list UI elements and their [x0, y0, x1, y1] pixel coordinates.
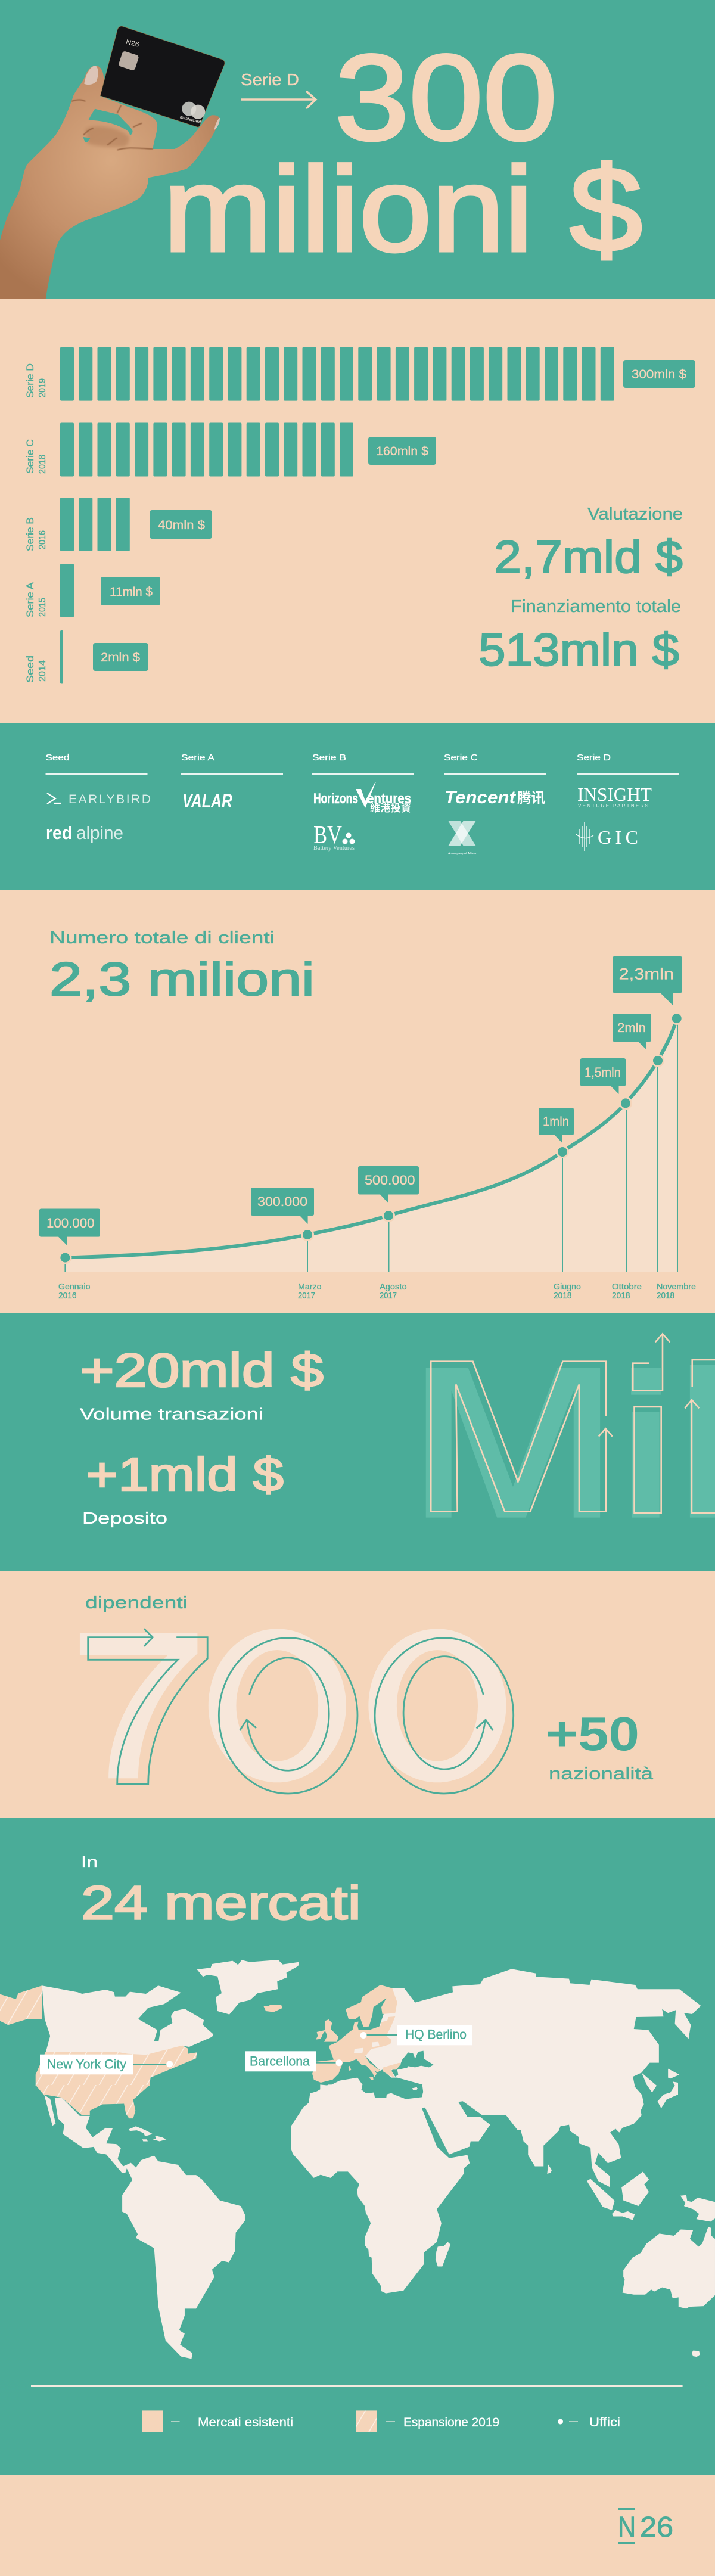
label: Serie D: Serie D [241, 70, 299, 89]
logo: Tencent: 腾讯 [517, 790, 545, 806]
legend item: Mercati esistenti [142, 2410, 293, 2432]
logo: Battery Ventures: Battery Ventures [313, 845, 355, 852]
logo: Horizons Ventures [313, 782, 411, 814]
panel: markets [0, 1818, 715, 2475]
row label: Seed 2014 [24, 655, 48, 683]
column: Serie D [576, 753, 679, 851]
logo: Earlybird: EARLYBIRD [69, 793, 151, 806]
row label: Serie B 2016: Serie B [24, 517, 36, 551]
value tag: 40mln $ [150, 510, 212, 539]
column: Serie C [444, 753, 546, 856]
axis labels: dates: Novembre [657, 1282, 696, 1292]
panel: hero [0, 0, 715, 299]
column: Serie A [181, 753, 283, 812]
axis labels: dates: 2018 [554, 1291, 572, 1301]
row label: Serie A 2015: 2015 [38, 598, 48, 617]
axis labels: dates: 2018 [657, 1291, 674, 1301]
axis labels: dates: Giugno [554, 1282, 581, 1292]
value tag: 2mln $: 2mln $ [101, 651, 140, 664]
graphic: Mil outline lettering [426, 1334, 715, 1518]
axis labels: dates: 2016 [58, 1291, 76, 1301]
axis labels: dates: Marzo [298, 1282, 322, 1292]
column: Seed [45, 753, 151, 843]
logo: Tencent [444, 788, 545, 807]
axis labels: dates: 2017 [298, 1291, 315, 1301]
bars: Serie D 300mln [60, 347, 614, 401]
value tag: 11mln $ [101, 577, 160, 605]
callout: 500.000: 500.000 [365, 1173, 415, 1188]
stat: 2,7mld $: 2,7mld $ [494, 532, 683, 583]
logo: N26: N [618, 2512, 636, 2543]
callout: 500.000 [358, 1166, 419, 1202]
label: dipendenti: dipendenti [85, 1593, 188, 1612]
value tag: 300mln $: 300mln $ [632, 368, 686, 381]
callout: 2mln [613, 1014, 651, 1049]
stat: +20mld $: +20mld $ [80, 1344, 324, 1397]
label: Volume transazioni: Volume transazioni [80, 1405, 263, 1423]
value tag: 2mln $ [93, 643, 148, 671]
logo: GIC [576, 822, 638, 851]
logo: Horizons Ventures: Horizons [313, 791, 358, 807]
column: Serie A: Serie A [181, 753, 214, 763]
logo: GIC: GIC [598, 826, 638, 848]
callout: 2,3mln [613, 956, 682, 1006]
row label: Seed 2014: 2014 [38, 660, 48, 682]
row label: Serie C 2018: Serie C [24, 439, 36, 474]
column: Serie C: Serie C [444, 753, 478, 763]
logo: red alpine: alpine [76, 822, 123, 843]
logo: Insight Venture Partners: INSIGHT [577, 784, 652, 805]
callout: 1mln: 1mln [543, 1114, 569, 1129]
callout: 100.000: 100.000 [46, 1216, 94, 1230]
bars: Serie B 40mln [60, 498, 130, 551]
label: Numero totale di clienti: Numero totale di clienti [49, 928, 275, 947]
office label: HQ Berlino: HQ Berlino [405, 2027, 467, 2042]
stat: 2,3 milioni: 2,3 milioni [49, 952, 315, 1005]
office label: Barcellona [245, 2051, 342, 2071]
legend [142, 2410, 620, 2432]
label: Deposito: Deposito [82, 1509, 167, 1527]
logo: N26: 26 [640, 2512, 673, 2543]
label: nazionalità: nazionalità [549, 1764, 654, 1783]
callout: 100.000 [39, 1208, 100, 1245]
bar: Serie A 11mln [60, 564, 74, 617]
office label: Barcellona: Barcellona [250, 2054, 310, 2069]
column: Serie B: Serie B [312, 753, 346, 763]
legend item: Uffici [558, 2416, 620, 2429]
image: hand holding black card [0, 26, 225, 299]
axis labels: dates: Agosto [380, 1282, 407, 1292]
graphic: 700 outline number [80, 1629, 514, 1794]
data points [60, 1013, 682, 1263]
legend item: Mercati esistenti: Mercati esistenti [198, 2416, 293, 2429]
axis labels: dates: 2017 [380, 1291, 397, 1301]
panel: volume [0, 1313, 715, 1571]
row label: Serie A 2015: Serie A [24, 582, 36, 617]
map: south polygons [36, 2084, 715, 2359]
title: 300: 300 [335, 30, 557, 166]
callout: 300.000: 300.000 [257, 1194, 307, 1209]
panel: customers [0, 890, 715, 1313]
stat: 513mln $: 513mln $ [478, 624, 679, 676]
column: Serie B [312, 753, 414, 852]
stat: +50: +50 [546, 1707, 639, 1760]
line chart: customer growth [60, 1013, 682, 1272]
stat: 24 mercati: 24 mercati [81, 1876, 361, 1929]
row label: Serie D 2019: Serie D [24, 363, 36, 398]
logo: Tencent: Tencent [444, 788, 517, 807]
logo: X [448, 821, 477, 856]
legend item: Uffici: Uffici [589, 2416, 620, 2429]
callout: 2,3mln: 2,3mln [618, 965, 674, 983]
panel: funding rounds [0, 299, 715, 723]
logo: Horizons Ventures: entures [367, 791, 411, 807]
value tag: 160mln $ [368, 437, 436, 465]
panel: employees [0, 1571, 715, 1818]
logo: Insight Venture Partners: VENTURE PARTNERS [578, 803, 648, 809]
row label: Serie D 2019: 2019 [38, 378, 48, 397]
callout: 1,5mln: 1,5mln [585, 1065, 621, 1080]
row label: Seed 2014: Seed [24, 655, 36, 683]
column: Seed: Seed [45, 753, 69, 763]
legend item: Espansione 2019 [356, 2410, 499, 2432]
office label: HQ Berlino [360, 2025, 472, 2045]
logo: red alpine: red [46, 822, 72, 843]
label: Finanziamento totale: Finanziamento totale [511, 597, 681, 616]
callout: 2mln: 2mln [617, 1020, 646, 1035]
panel: footer [0, 2475, 715, 2576]
panel: investors [0, 723, 715, 890]
logo: X: A company of Allianz [448, 852, 477, 856]
callout: 1mln [539, 1108, 574, 1143]
value tag: 40mln $: 40mln $ [158, 518, 205, 532]
row label: Serie C 2018 [24, 439, 48, 474]
axis labels: dates: Gennaio [58, 1282, 91, 1292]
row label: Serie B 2016 [24, 517, 48, 551]
stat: +1mld $: +1mld $ [86, 1448, 284, 1501]
value tag: 160mln $: 160mln $ [376, 445, 428, 458]
value tag: 300mln $ [623, 360, 695, 388]
bar: Seed 2mln [60, 630, 63, 684]
arrow: to 300 [241, 91, 316, 108]
row label: Serie C 2018: 2018 [38, 455, 48, 474]
row label: Serie D 2019 [24, 363, 48, 398]
label: In: In [81, 1853, 98, 1871]
image: hand holding black card: mastercard [179, 115, 201, 125]
map: Eurasia west and Europe [312, 1977, 499, 2090]
column: Serie D: Serie D [577, 753, 611, 763]
logo: Battery Ventures: BV [313, 822, 342, 849]
callout: 1,5mln [580, 1058, 626, 1094]
callout: 300.000 [251, 1188, 314, 1224]
legend item: Espansione 2019: Espansione 2019 [403, 2416, 499, 2429]
office label: New York City: New York City [47, 2057, 126, 2072]
value tag: 11mln $: 11mln $ [110, 585, 153, 599]
world map [0, 1960, 715, 2359]
label: Valutazione: Valutazione [587, 505, 683, 524]
row label: Serie A 2015 [24, 582, 48, 617]
map: north polygons [0, 1960, 701, 2108]
logo: Horizons Ventures: 維港投資 [370, 802, 411, 814]
axis labels: dates [58, 1282, 696, 1301]
logo: N26 [618, 2508, 673, 2544]
image: hand holding black card: N26 [125, 39, 140, 49]
office label: New York City [40, 2055, 173, 2074]
bars: Serie C 160mln [60, 423, 353, 477]
logo: Valar: VALAR [182, 790, 232, 812]
axis labels: dates: Ottobre [612, 1282, 642, 1292]
row label: Serie B 2016: 2016 [38, 530, 48, 549]
title: milioni $: milioni $ [163, 142, 642, 276]
axis labels: dates: 2018 [612, 1291, 630, 1301]
logo: red alpine [46, 822, 123, 843]
